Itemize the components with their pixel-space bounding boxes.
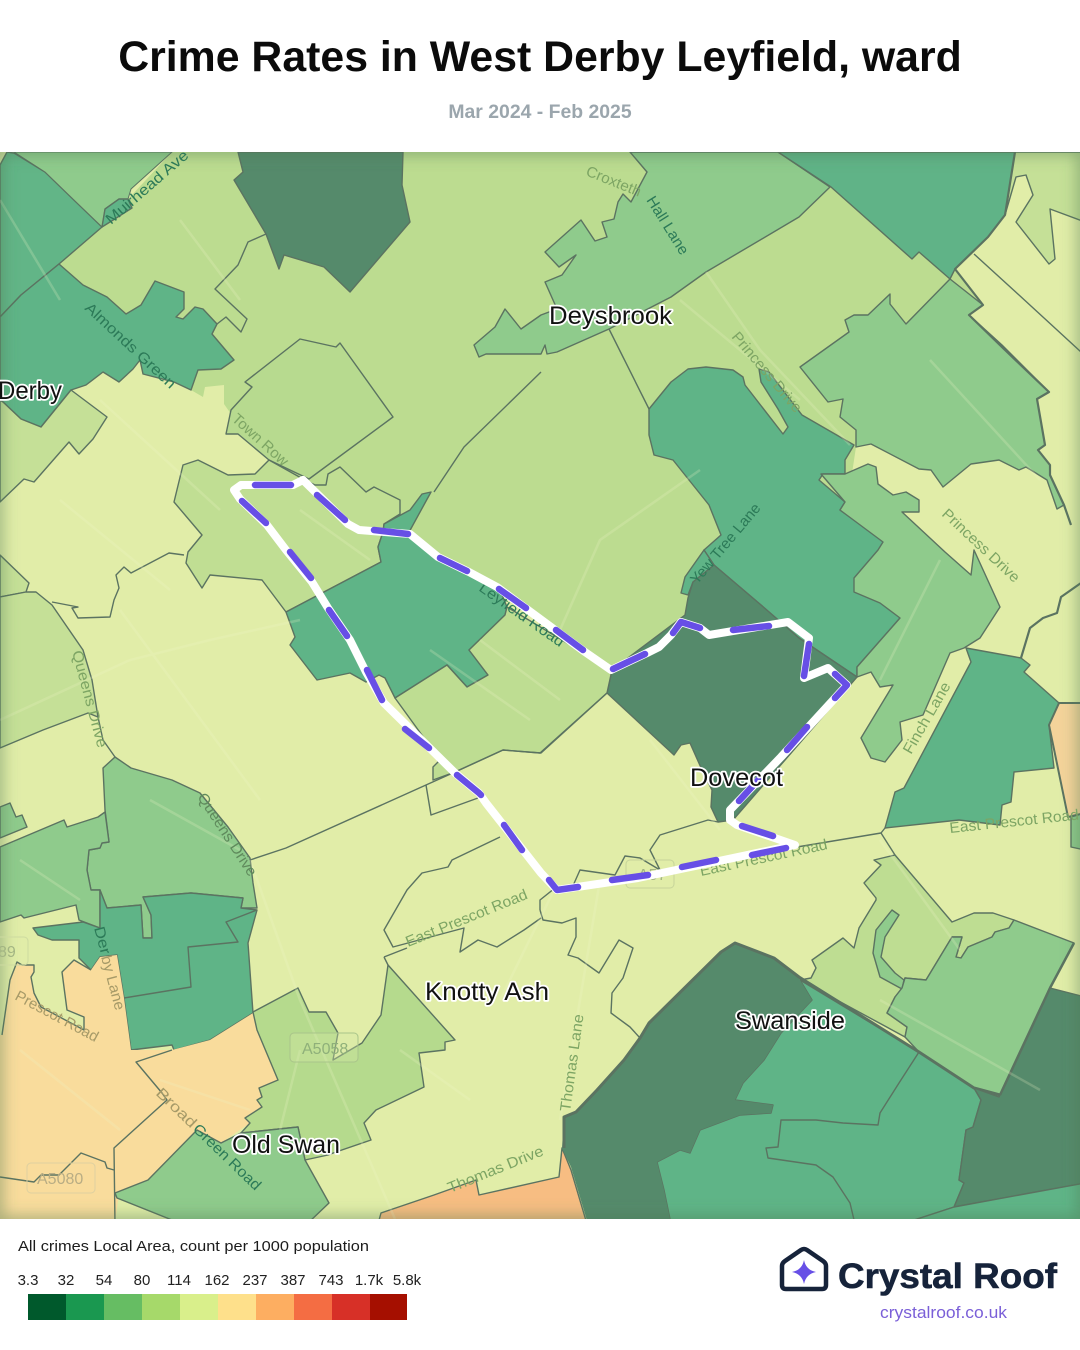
road number labels: A5080 xyxy=(37,1171,83,1188)
road labels: Prescot Road xyxy=(12,988,101,1046)
legend colour scale xyxy=(28,1294,407,1320)
place labels: Derby xyxy=(0,377,62,405)
legend values: 54 xyxy=(96,1272,112,1289)
road labels: Almonds Green xyxy=(81,299,179,392)
crime rate areas xyxy=(0,152,1080,1224)
legend values: 3.3 xyxy=(18,1272,38,1289)
road labels: Queens Drive xyxy=(194,790,260,880)
place labels: Old Swan xyxy=(232,1131,340,1159)
place labels: Knotty Ash xyxy=(425,978,549,1006)
road number labels: A57 xyxy=(638,867,667,884)
road number labels xyxy=(0,860,674,1193)
legend values: 1.7k xyxy=(355,1272,384,1289)
subtitle: date range: Mar 2024 - Feb 2025 xyxy=(448,101,632,123)
road labels: Green Road xyxy=(189,1121,264,1194)
road labels: Princess Drive xyxy=(728,329,805,416)
legend values: 80 xyxy=(134,1272,150,1289)
road labels: Princess Drive xyxy=(938,505,1023,586)
road labels: by Lane xyxy=(97,954,128,1012)
legend values: 5.8k xyxy=(393,1272,422,1289)
road labels xyxy=(12,147,1080,1197)
place labels: Deysbrook xyxy=(549,302,673,330)
road labels: Croxteth xyxy=(584,163,644,200)
road labels: Thomas Lane xyxy=(557,1013,588,1113)
road labels: Town Row xyxy=(228,410,292,470)
legend values: 162 xyxy=(204,1272,230,1289)
logo wordmark: Crystal Roof xyxy=(838,1257,1057,1296)
place labels: Dovecot xyxy=(690,764,783,792)
map area xyxy=(0,146,1080,1225)
road labels: East Prescot Road xyxy=(403,886,530,951)
logo xyxy=(782,1249,1057,1322)
road labels: Yew Tree Lane xyxy=(687,500,764,588)
road labels: Leyfield Road xyxy=(476,579,567,651)
road labels: Hall Lane xyxy=(643,193,692,258)
title: Crime Rates in West Derby Leyfield, ward xyxy=(118,33,962,81)
road labels: Der xyxy=(90,925,114,956)
road labels: East Prescot Road xyxy=(698,836,829,880)
logo url: crystalroof.co.uk xyxy=(880,1304,1008,1322)
legend title: All crimes Local Area, count per 1000 population xyxy=(18,1238,369,1255)
ward boundary xyxy=(234,480,847,890)
road labels: East Prescot Road xyxy=(949,806,1080,837)
icon: house with star xyxy=(782,1249,826,1289)
road labels: Muirhead Ave xyxy=(102,147,192,228)
legend values: 237 xyxy=(242,1272,268,1289)
place labels xyxy=(0,302,845,1159)
road labels: Broad xyxy=(152,1085,200,1132)
legend values: 114 xyxy=(167,1272,191,1289)
road number labels: A5058 xyxy=(302,1041,348,1058)
road labels: Queens Drive xyxy=(68,649,110,750)
legend xyxy=(18,1238,422,1320)
place labels: Swanside xyxy=(735,1007,845,1035)
road labels: Finch Lane xyxy=(900,679,954,757)
road labels: Thomas Drive xyxy=(445,1143,546,1197)
legend values: 32 xyxy=(58,1272,74,1289)
legend values xyxy=(18,1272,422,1289)
edge vignette xyxy=(0,146,1080,1225)
legend values: 387 xyxy=(280,1272,306,1289)
legend values: 743 xyxy=(318,1272,344,1289)
faint road network xyxy=(0,200,1040,1219)
